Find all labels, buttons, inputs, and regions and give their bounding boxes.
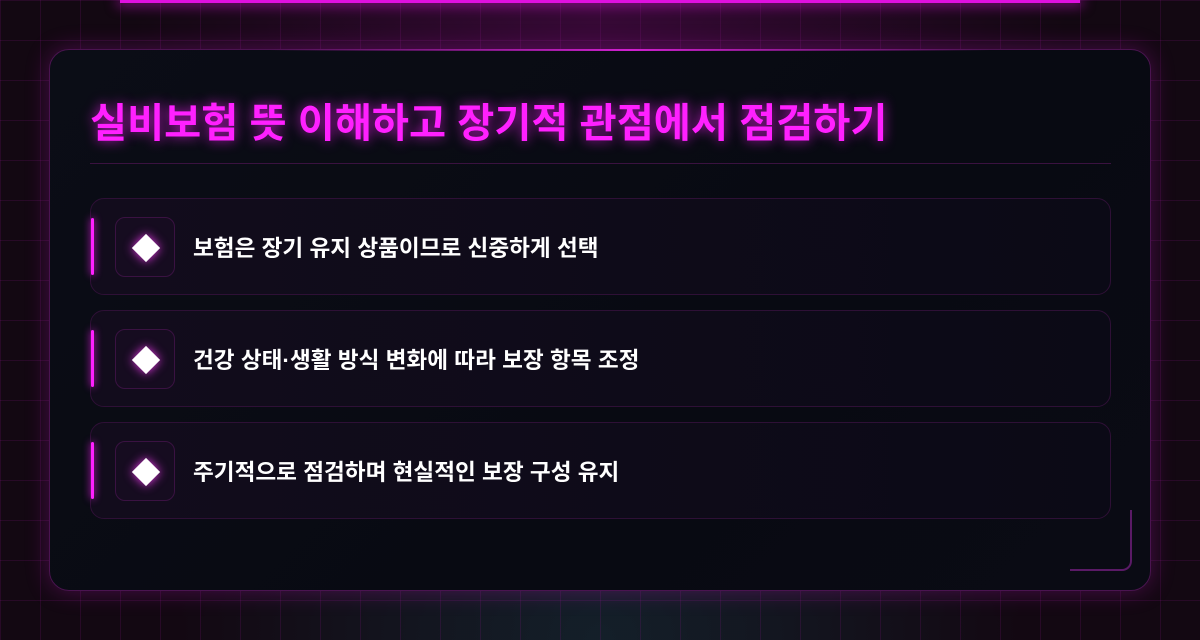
text: item 2: 건강 상태·생활 방식 변화에 따라 보장 항목 조정 bbox=[193, 348, 639, 373]
panel: main card bbox=[49, 49, 1151, 591]
text: item 3: 주기적으로 점검하며 현실적인 보장 구성 유지 bbox=[193, 460, 619, 485]
icon: diamond 3 bbox=[115, 441, 175, 501]
card: item 1 bbox=[90, 198, 1111, 295]
icon: diamond 2 bbox=[115, 329, 175, 389]
card: item 3 bbox=[90, 422, 1111, 519]
card: item 2 bbox=[90, 310, 1111, 407]
text: item 1: 보험은 장기 유지 상품이므로 신중하게 선택 bbox=[193, 236, 599, 261]
icon: diamond 1 bbox=[115, 217, 175, 277]
title: 실비보험 뜻 이해하고 장기적 관점에서 점검하기 bbox=[90, 101, 887, 146]
